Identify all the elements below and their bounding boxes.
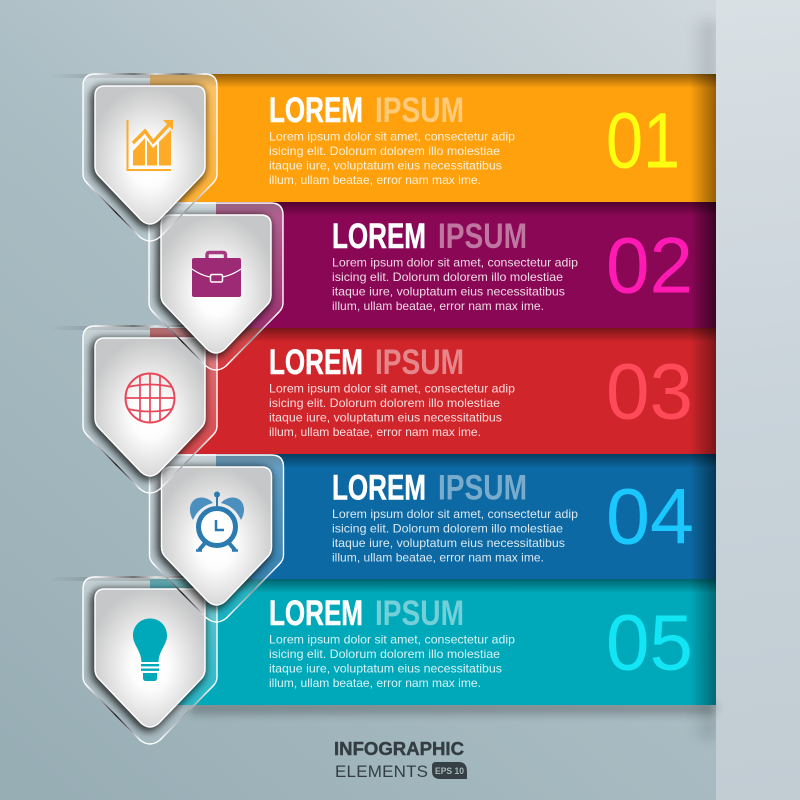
right paper strip [690, 0, 800, 800]
body text 04: isicing elit. Dolorum dolorem illo molestiae [332, 522, 563, 536]
body text 02: illum, ullam beatae, error nam max ime. [332, 299, 544, 313]
heading 02: LOREM [332, 217, 426, 256]
shield 04 with alarm clock [150, 455, 284, 622]
body text 03 [269, 382, 515, 439]
panel: ribbon 01 orange [150, 74, 716, 202]
number 02: 02 [606, 220, 693, 310]
body text 01: illum, ullam beatae, error nam max ime. [269, 173, 481, 187]
shield 01 with chart [83, 74, 217, 241]
body text 01: isicing elit. Dolorum dolorem illo molestiae [269, 144, 500, 158]
heading 01: LOREM [269, 91, 363, 130]
number 01: 01 [606, 96, 680, 184]
shield 02 with briefcase [149, 203, 283, 370]
panel: ribbon 03 red [150, 328, 716, 454]
number 04: 04 [606, 472, 694, 560]
heading 03: LOREM [269, 343, 363, 382]
body text 03: Lorem ipsum dolor sit amet, consectetur adip [269, 382, 515, 396]
body text 02: Lorem ipsum dolor sit amet, consectetur adip [332, 256, 578, 270]
number 03: 03 [606, 346, 693, 436]
panel: ribbon 04 blue [216, 454, 716, 579]
icon: globe [126, 374, 174, 422]
body text 01 [269, 130, 515, 187]
body text 01: Lorem ipsum dolor sit amet, consectetur adip [269, 130, 515, 144]
badge: eps 10: EPS 10 [435, 766, 464, 777]
body text 05: illum, ullam beatae, error nam max ime. [269, 676, 481, 690]
panel: ribbon 05 teal [150, 579, 716, 705]
heading 05: LOREM [269, 594, 363, 633]
heading accent 02: IPSUM [438, 217, 527, 256]
body text 05 [269, 632, 515, 690]
body text 02 [332, 256, 578, 313]
icon: bar chart with arrow [126, 120, 173, 171]
body text 01: itaque iure, voluptatum eius necessitatibus [269, 158, 502, 172]
icon: alarm clock [190, 492, 244, 550]
heading accent 04: IPSUM [438, 468, 527, 508]
shadow below ribbons [190, 703, 715, 713]
shield 05 with bulb [83, 577, 217, 744]
body text 02: isicing elit. Dolorum dolorem illo molestiae [332, 270, 563, 284]
body text 05: isicing elit. Dolorum dolorem illo molestiae [269, 647, 500, 661]
fold shadows left of ribbons [50, 74, 150, 581]
body text 04: itaque iure, voluptatum eius necessitatibus [332, 536, 565, 550]
body text 04: Lorem ipsum dolor sit amet, consectetur adip [332, 507, 578, 521]
logo line 1: INFOGRAPHIC [334, 739, 464, 759]
icon: light bulb [133, 618, 167, 681]
logo line 2: ELEMENTS [335, 762, 428, 781]
body text 05: itaque iure, voluptatum eius necessitatibus [269, 662, 502, 676]
logo: infographic elements [334, 739, 467, 781]
heading accent 01: IPSUM [375, 91, 464, 130]
icon: briefcase [192, 252, 241, 297]
body text 02: itaque iure, voluptatum eius necessitatibus [332, 284, 565, 298]
heading 04: LOREM [332, 468, 426, 508]
heading accent 05: IPSUM [375, 594, 464, 633]
heading accent 03: IPSUM [375, 343, 464, 382]
body text 03: itaque iure, voluptatum eius necessitatibus [269, 410, 502, 424]
body text 05: Lorem ipsum dolor sit amet, consectetur adip [269, 632, 515, 646]
body text 04 [332, 507, 578, 564]
number 05: 05 [606, 598, 693, 686]
shield 03 with globe [83, 326, 217, 493]
body text 03: isicing elit. Dolorum dolorem illo molestiae [269, 396, 500, 410]
body text 03: illum, ullam beatae, error nam max ime. [269, 425, 481, 439]
panel: ribbon 02 purple [216, 202, 716, 328]
body text 04: illum, ullam beatae, error nam max ime. [332, 550, 544, 564]
